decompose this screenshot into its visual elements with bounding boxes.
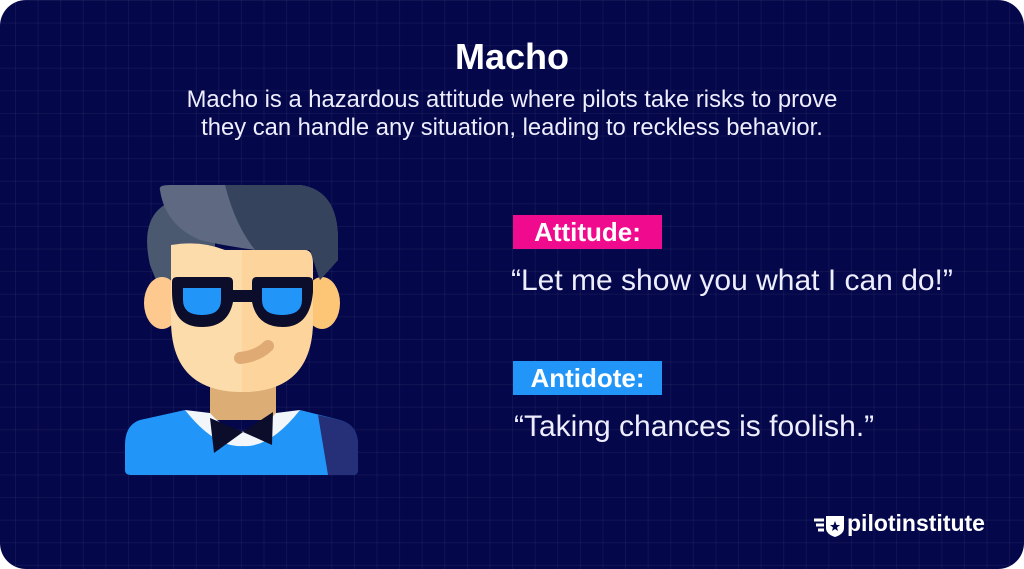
neck xyxy=(210,370,276,420)
mouth xyxy=(240,346,268,358)
attitude label xyxy=(513,215,662,249)
logo xyxy=(814,510,985,537)
face xyxy=(171,243,313,392)
subtitle: Macho is a hazardous attitude where pilots take risks to prove xyxy=(187,86,837,113)
text: pilotinstitute xyxy=(847,510,985,536)
glasses xyxy=(172,277,313,327)
bow tie xyxy=(210,412,273,453)
subtitle: they can handle any situation, leading to reckless behavior. xyxy=(201,114,823,141)
back hair xyxy=(147,200,215,290)
antidote label xyxy=(513,361,662,395)
subtitle xyxy=(187,86,837,141)
antidote quote: “Taking chances is foolish.” xyxy=(514,410,874,443)
shirt xyxy=(125,410,358,475)
antidote label: Antidote: xyxy=(530,363,645,393)
collar xyxy=(185,410,300,446)
attitude label: Attitude: xyxy=(534,217,641,247)
title: Macho xyxy=(455,36,569,77)
front hair xyxy=(160,185,338,280)
ears xyxy=(144,277,180,329)
attitude quote: “Let me show you what I can do!” xyxy=(511,264,953,297)
